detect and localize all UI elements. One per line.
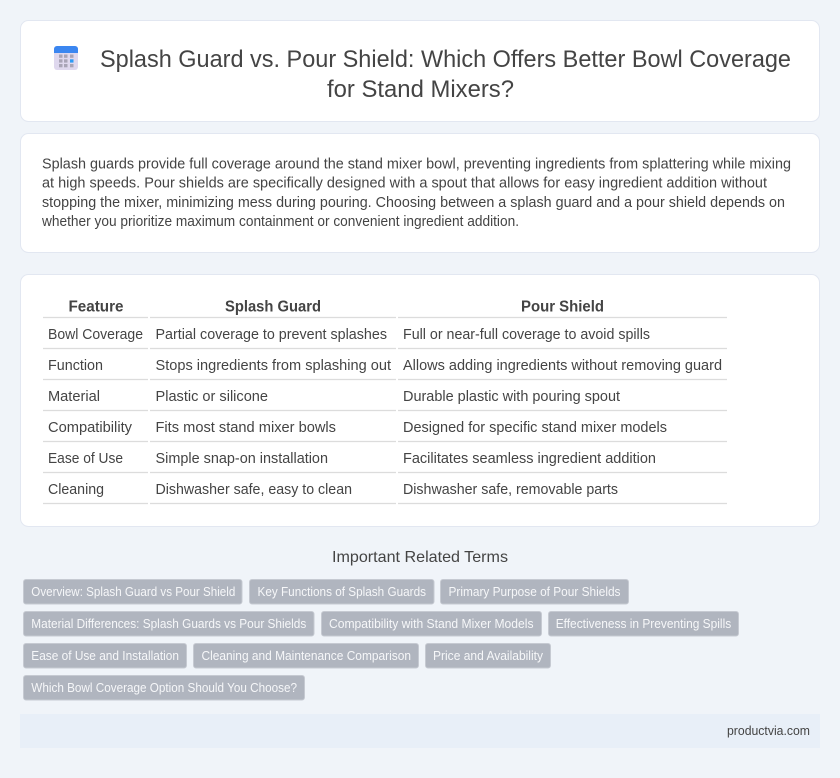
row: material: Plastic or silicone [156, 389, 268, 405]
tag [24, 644, 186, 668]
tag: Key Functions of Splash Guards [258, 585, 426, 599]
row: material: Durable plastic with pouring spout [403, 389, 620, 405]
tag [24, 676, 304, 700]
row: bowl coverage: Full or near-full coverage to avoid spills [403, 327, 650, 343]
row: ease of use [48, 451, 656, 467]
table header: Feature [68, 299, 124, 316]
tag [322, 612, 542, 636]
row: material [48, 389, 620, 405]
tag: Primary Purpose of Pour Shields [448, 585, 620, 599]
row: ease of use: Ease of Use [48, 451, 123, 467]
tag: Compatibility with Stand Mixer Models [329, 617, 534, 631]
tag: Price and Availability [433, 649, 544, 663]
tag [24, 580, 242, 604]
tag: Which Bowl Coverage Option Should You Choose? [31, 681, 297, 695]
row: cleaning: Dishwasher safe, removable parts [403, 482, 618, 498]
row: material: Material [48, 389, 100, 405]
table header [68, 299, 604, 316]
row: function [48, 358, 722, 374]
icon: calendar grid [54, 46, 78, 70]
tag: Effectiveness in Preventing Spills [556, 617, 731, 631]
row: function: Allows adding ingredients without removing guard [403, 358, 722, 374]
footer source: productvia.com [727, 724, 810, 738]
heading: related terms: Important Related Terms [332, 549, 508, 566]
row: bowl coverage: Bowl Coverage [48, 327, 143, 343]
tag [548, 612, 738, 636]
tag: Overview: Splash Guard vs Pour Shield [31, 585, 235, 599]
row: compatibility: Designed for specific stand mixer models [403, 420, 667, 436]
tag [194, 644, 418, 668]
row: ease of use: Facilitates seamless ingredient addition [403, 451, 656, 467]
tag: Ease of Use and Installation [31, 649, 179, 663]
row: cleaning: Dishwasher safe, easy to clean [156, 482, 352, 498]
tag [250, 580, 434, 604]
tag: Material Differences: Splash Guards vs Pour Shields [31, 617, 306, 631]
panel: header [20, 20, 820, 122]
tag [440, 580, 628, 604]
row: compatibility: Compatibility [48, 420, 133, 436]
row: bowl coverage: Partial coverage to prevent splashes [156, 327, 387, 343]
row: cleaning: Cleaning [48, 482, 104, 498]
panel: comparison table [20, 274, 820, 526]
row: compatibility [48, 420, 667, 436]
tag [24, 612, 314, 636]
related term tags [24, 580, 738, 700]
summary text: stopping the mixer, minimizing mess during pouring. Choosing between a splash guard and a pour shield depends on [42, 195, 785, 211]
row: function: Function [48, 358, 103, 374]
panel: summary [20, 134, 820, 252]
title: Splash Guard vs. Pour Shield: Which Offers Better Bowl Coverage [100, 46, 791, 73]
row: function: Stops ingredients from splashing out [156, 358, 391, 374]
summary text: at high speeds. Pour shields are specifically designed with a spout that allows for easy ingredient addition without [42, 176, 767, 192]
tag [426, 644, 550, 668]
row: bowl coverage [48, 327, 650, 343]
row: cleaning [48, 482, 618, 498]
table header: Pour Shield [521, 299, 604, 316]
title [100, 46, 791, 103]
summary text: whether you prioritize maximum containment or convenient ingredient addition. [41, 214, 519, 230]
title: for Stand Mixers? [327, 76, 514, 103]
tag: Cleaning and Maintenance Comparison [202, 649, 411, 663]
table header: Splash Guard [225, 299, 321, 316]
summary text: Splash guards provide full coverage around the stand mixer bowl, preventing ingredients from splattering while mixing [42, 156, 791, 172]
row: compatibility: Fits most stand mixer bowls [156, 420, 336, 436]
row: ease of use: Simple snap-on installation [156, 451, 328, 467]
summary text [41, 156, 791, 230]
footer [20, 714, 820, 748]
